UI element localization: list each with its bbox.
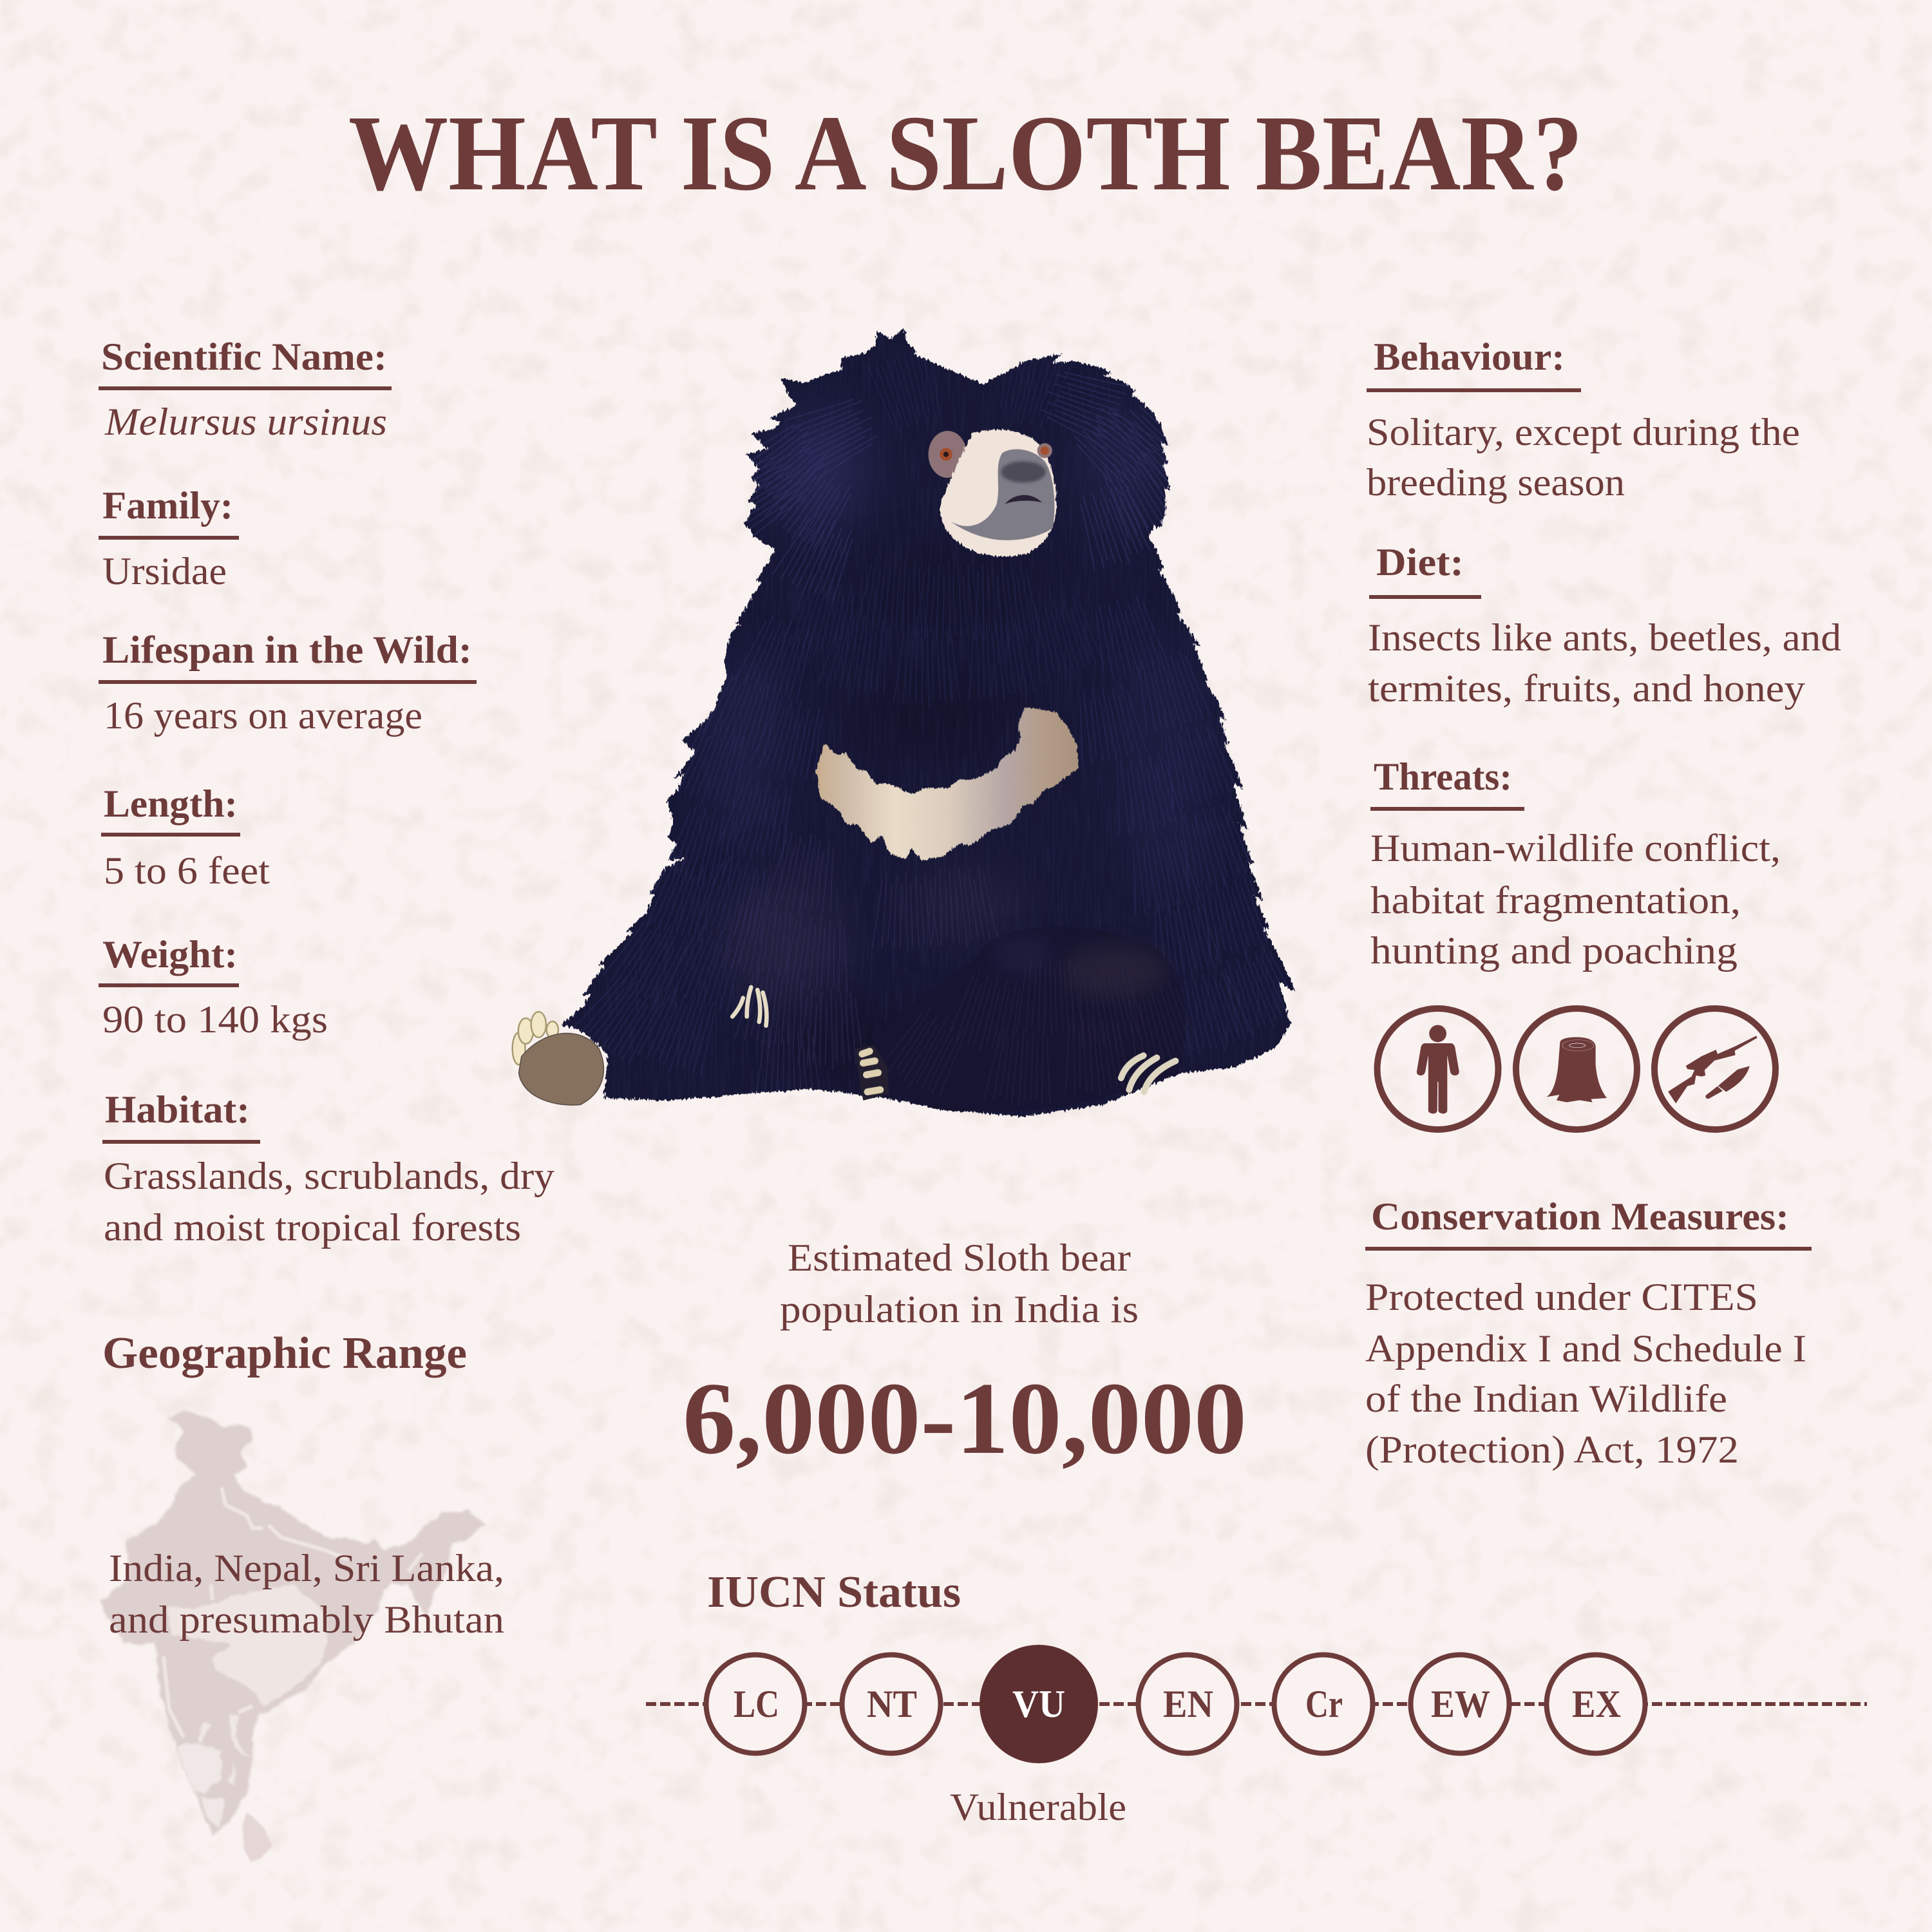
status: VU active <box>980 1645 1098 1763</box>
text: conservation detail: (Protection) Act, 1972 <box>1365 1428 1739 1471</box>
text: range countries: and presumably Bhutan <box>109 1598 504 1641</box>
fact: lifespan: Lifespan in the Wild: <box>102 629 472 671</box>
fact: behaviour: Behaviour: <box>1374 336 1565 378</box>
heading: conservation measures: Conservation Measures: <box>1371 1195 1789 1238</box>
fact: habitat: and moist tropical forests <box>104 1206 521 1249</box>
fact: family: Ursidae <box>102 550 227 592</box>
status: EW: EW <box>1431 1683 1490 1725</box>
fact: family <box>99 484 239 592</box>
fact: diet: Diet: <box>1376 541 1464 583</box>
bear paws and claws <box>513 987 1175 1105</box>
status: VU active: VU <box>1012 1683 1065 1725</box>
panel: behaviour, diet, threats <box>1367 336 1841 1130</box>
panel: IUCN status <box>646 1567 1867 1828</box>
text: conservation detail: of the Indian Wildlife <box>1365 1378 1727 1420</box>
fur strokes <box>571 338 1303 1107</box>
icon: rifle and knife <box>1654 1009 1776 1130</box>
fact: lifespan <box>99 629 477 737</box>
status: EW <box>1410 1655 1510 1753</box>
status: EN <box>1139 1655 1236 1753</box>
status: NT: NT <box>867 1683 917 1725</box>
fact: behaviour <box>1367 336 1800 504</box>
fact: weight: Weight: <box>102 933 238 976</box>
bear body fur <box>562 328 1298 1118</box>
status: EX: EX <box>1572 1683 1621 1725</box>
bear eyes <box>940 443 1052 460</box>
fact: weight <box>99 933 328 1041</box>
fact: threats: habitat fragmentation, <box>1370 879 1741 922</box>
text: population caption <box>780 1236 1139 1331</box>
fact: habitat: Habitat: <box>105 1088 250 1131</box>
text: population caption: Estimated Sloth bear <box>788 1236 1131 1279</box>
fact: threats: Human-wildlife conflict, <box>1370 827 1781 869</box>
fact: length <box>101 782 270 892</box>
map: India and Sri Lanka <box>100 1411 486 1862</box>
heading: IUCN status: IUCN Status <box>707 1567 961 1617</box>
fact: behaviour: breeding season <box>1367 461 1625 504</box>
text: population caption: population in India is <box>780 1288 1139 1331</box>
title: WHAT IS A SLOTH BEAR? <box>348 93 1583 213</box>
status: LC: LC <box>734 1683 779 1725</box>
illustration: sloth bear <box>511 328 1298 1118</box>
fact: diet <box>1368 541 1841 710</box>
status: EN: EN <box>1163 1683 1213 1725</box>
fact: habitat: Grasslands, scrublands, dry <box>104 1155 554 1197</box>
number: population: 6,000-10,000 <box>683 1361 1247 1475</box>
panel: species facts <box>99 336 554 1249</box>
fact: threats: Threats: <box>1374 755 1512 798</box>
status: EX <box>1547 1655 1645 1753</box>
label: vulnerable: Vulnerable <box>950 1786 1126 1828</box>
fact: family: Family: <box>102 484 233 527</box>
text: conservation detail: Protected under CITES <box>1365 1276 1758 1318</box>
icon: human <box>1377 1009 1498 1130</box>
text: conservation detail <box>1365 1276 1806 1471</box>
fact: threats <box>1370 755 1781 972</box>
panel: geographic range <box>100 1329 504 1862</box>
panel: population estimate <box>683 1236 1247 1475</box>
fact: scientific name: Melursus ursinus <box>104 401 387 443</box>
text: range countries <box>109 1547 504 1641</box>
fact: behaviour: Solitary, except during the <box>1367 411 1800 453</box>
status: Cr: Cr <box>1305 1683 1343 1725</box>
bear chest crescent <box>816 707 1078 860</box>
bear hind leg <box>874 927 1202 1112</box>
text: range countries: India, Nepal, Sri Lanka, <box>109 1547 504 1589</box>
fact: scientific name <box>99 336 392 443</box>
panel: conservation measures <box>1365 1195 1812 1471</box>
bear muzzle <box>929 430 1057 556</box>
heading: geographic range: Geographic Range <box>102 1329 467 1378</box>
fact: lifespan: 16 years on average <box>104 694 422 737</box>
fact: threats: hunting and poaching <box>1370 929 1738 972</box>
text: conservation detail: Appendix I and Schedule I <box>1365 1327 1806 1370</box>
fact: diet: termites, fruits, and honey <box>1368 667 1805 710</box>
status: NT <box>842 1655 940 1753</box>
icon: tree stump <box>1516 1009 1637 1130</box>
status scale <box>646 1645 1867 1763</box>
fact: length: Length: <box>104 782 238 825</box>
fact: weight: 90 to 140 kgs <box>102 998 328 1041</box>
fact: diet: Insects like ants, beetles, and <box>1368 616 1841 659</box>
fact: habitat <box>102 1088 554 1249</box>
fact: length: 5 to 6 feet <box>104 849 270 892</box>
fact: scientific name: Scientific Name: <box>101 336 387 378</box>
status: LC <box>706 1655 805 1753</box>
status: Cr <box>1274 1655 1373 1753</box>
